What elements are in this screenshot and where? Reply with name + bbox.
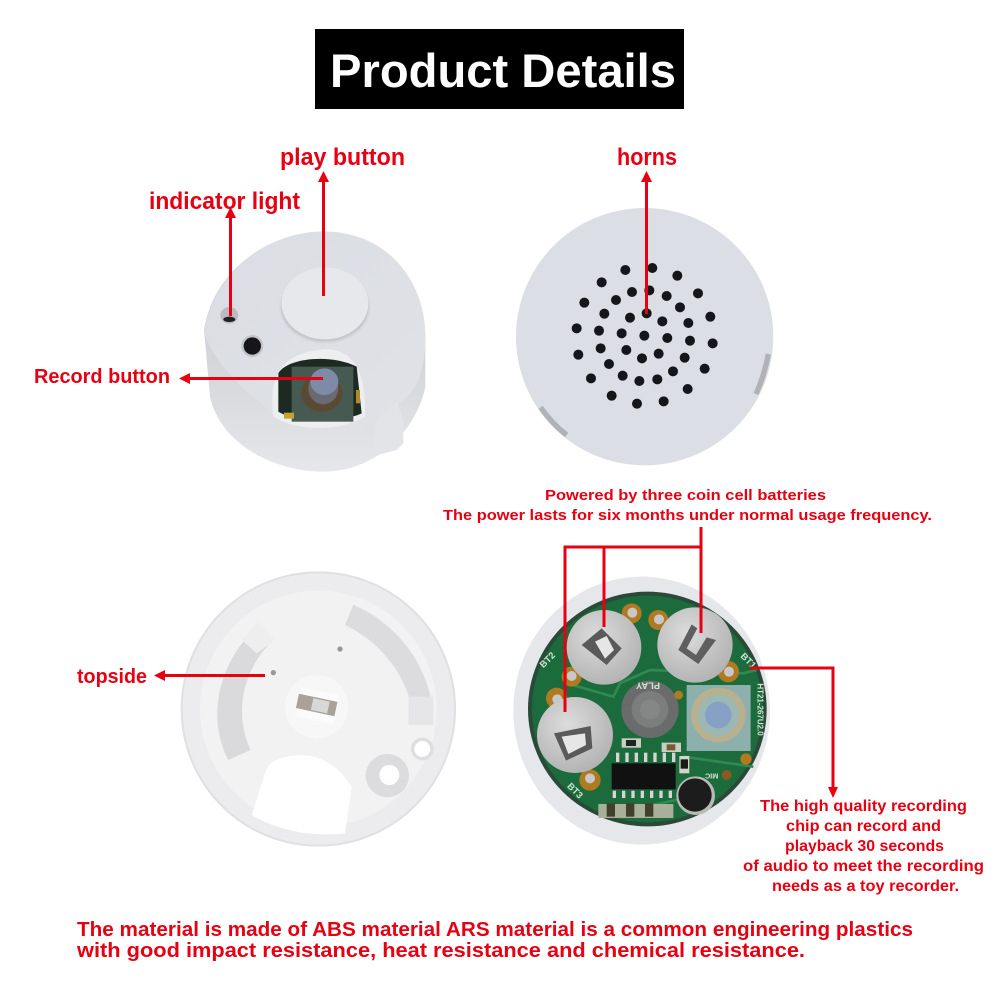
label: indicator light: indicator light [149, 188, 300, 215]
board markings: BT2 [538, 650, 557, 670]
label: play button: play button [280, 144, 405, 171]
chip [598, 738, 689, 818]
label: battery note [443, 487, 932, 524]
arrow: indicator light [225, 207, 236, 316]
label: recording chip note: of audio to meet the recording [743, 858, 984, 875]
label: battery note: Powered by three coin cell batteries [545, 487, 826, 504]
arrows: battery leader lines [565, 527, 701, 712]
arrow: horns [641, 171, 652, 314]
board markings: HT21-267U2.0 [755, 683, 764, 736]
footer: material note: The material is made of ABS material ARS material is a common engineering plastics [77, 919, 913, 941]
label: recording chip note: needs as a toy recorder. [772, 878, 959, 895]
record switch [674, 685, 752, 780]
board markings: PLAY [635, 681, 660, 691]
label: horns: horns [617, 144, 677, 171]
label: recording chip note: chip can record and [786, 818, 941, 835]
label: recording chip note [743, 798, 984, 895]
microphone [676, 776, 715, 815]
photo: topside cover [182, 572, 455, 846]
label: topside: topside [77, 666, 147, 688]
arrow: topside [154, 670, 265, 681]
photo: circuit board [513, 577, 770, 845]
board markings: BT1 [739, 651, 758, 671]
label: recording chip note: The high quality recording [760, 798, 967, 815]
board markings: BT3 [565, 781, 585, 801]
label: record button: Record button [34, 366, 170, 388]
label: recording chip note: playback 30 seconds [785, 838, 944, 855]
play switch [621, 681, 679, 738]
footer: material note: with good impact resistance, heat resistance and chemical resistance. [76, 940, 805, 962]
board markings: MIC [704, 771, 718, 780]
footer: material note [76, 919, 913, 962]
board markings [538, 650, 764, 801]
title [315, 29, 684, 109]
label: battery note: The power lasts for six months under normal usage frequency. [443, 507, 932, 524]
photo: speaker holes [516, 208, 773, 465]
battery: BT3 [537, 688, 613, 791]
battery: BT2 [562, 603, 642, 687]
title: Product Details [330, 44, 676, 97]
battery: BT1 [648, 607, 739, 683]
photo: module with buttons [204, 232, 425, 472]
arrow: recording chip leader [749, 668, 838, 798]
arrow: record button [179, 373, 323, 384]
arrow: play button [318, 171, 329, 296]
